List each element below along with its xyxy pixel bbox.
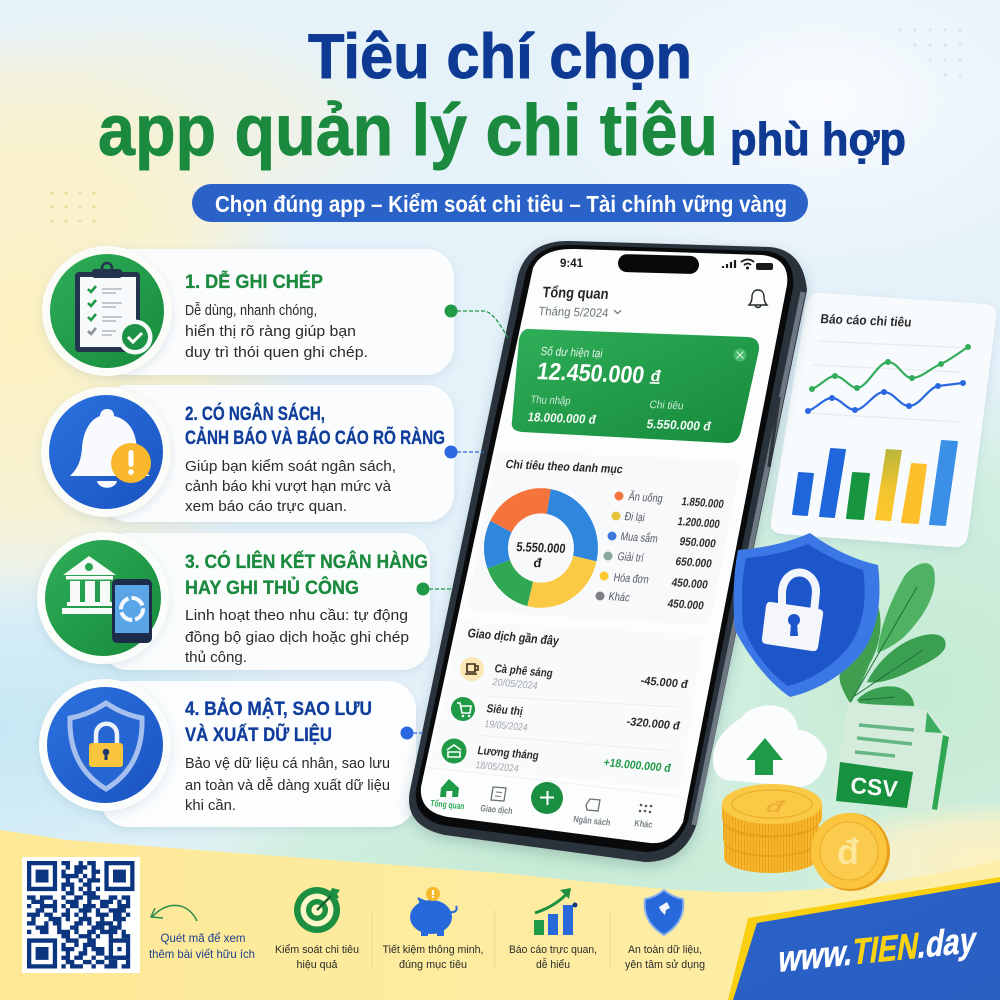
arrow: curved to QR xyxy=(151,905,197,921)
icon: growth chart xyxy=(534,888,578,935)
icon: clipboard checklist xyxy=(42,246,172,376)
text: scan caption: thêm bài viết hữu ích xyxy=(149,947,255,961)
balance card xyxy=(512,329,759,443)
text: benefit 3 xyxy=(509,944,597,971)
illustration: gold coins xyxy=(722,784,890,891)
bottom navigation bar xyxy=(427,767,677,830)
text: description 1: hiển thị rõ ràng giúp bạn xyxy=(185,323,356,340)
chart legend: Hóa đơn xyxy=(612,571,650,586)
icon: notification bell xyxy=(749,290,767,308)
balance card: 5.550.000 đ xyxy=(645,417,712,434)
balance card: Số dư hiện tại xyxy=(539,344,604,360)
text: benefit 3: dễ hiểu xyxy=(536,958,570,971)
illustration: cloud upload xyxy=(713,705,827,787)
heading 2 xyxy=(185,403,445,449)
transaction: salary: 18/05/2024 xyxy=(474,760,520,775)
text: benefit 4 xyxy=(625,944,705,971)
connector 2 xyxy=(444,446,484,458)
title: app quản lý chi tiêu xyxy=(98,91,718,171)
icon: shield padlock xyxy=(39,679,171,811)
transaction: salary: Lương tháng xyxy=(476,744,540,762)
heading 3 xyxy=(185,551,428,599)
icon: piggy bank xyxy=(410,887,457,936)
heading 1: 1. DỄ GHI CHÉP xyxy=(185,271,323,293)
status bar: 9:41 xyxy=(560,256,583,270)
benefit 3 xyxy=(509,888,597,971)
nav item: overview xyxy=(430,779,465,811)
screen header xyxy=(538,284,621,320)
balance card: 18.000.000 đ xyxy=(526,410,597,427)
balance card: 12.450.000 xyxy=(535,358,646,389)
balance card: đ xyxy=(649,367,662,385)
icon: target xyxy=(294,887,340,933)
text: scan caption: Quét mã để xem xyxy=(160,931,246,945)
nav item: budget: Ngân sách xyxy=(573,814,611,828)
icon: bell alert xyxy=(41,387,171,517)
text: description 1 xyxy=(185,302,368,361)
title: phù hợp xyxy=(730,113,906,165)
heading 4 xyxy=(185,698,372,746)
title xyxy=(98,22,906,171)
chart legend: 450.000 xyxy=(666,597,705,612)
text: description 3: đồng bộ giao dịch hoặc ghi chép xyxy=(185,629,409,646)
recent transactions panel xyxy=(430,622,703,790)
illustration: 3D shield with padlock xyxy=(734,533,879,697)
QR code xyxy=(22,857,140,973)
text: website url: www.TIEN.day xyxy=(775,918,980,980)
heading 2: CẢNH BÁO VÀ BÁO CÁO RÕ RÀNG xyxy=(185,427,445,449)
chart legend: Ăn uống xyxy=(627,490,664,505)
text: benefit 2 xyxy=(382,944,484,971)
balance card: Chi tiêu xyxy=(648,399,685,412)
heading 3: HAY GHI THỦ CÔNG xyxy=(185,577,359,599)
chart legend: Mua sắm xyxy=(619,530,659,546)
transaction: supermarket: Siêu thị xyxy=(485,702,524,718)
benefit 1 xyxy=(275,887,359,971)
title: Tiêu chí chọn xyxy=(308,22,692,92)
text: description 4: khi cần. xyxy=(185,797,236,814)
connector 3 xyxy=(416,582,453,596)
text: description 1: Dễ dùng, nhanh chóng, xyxy=(185,302,317,319)
nav item: overview: Tổng quan xyxy=(430,798,465,811)
text: description 3: thủ công. xyxy=(185,649,247,666)
text: benefit 2: đúng mục tiêu xyxy=(399,959,467,971)
line chart xyxy=(805,344,971,414)
illustration: plant leaves xyxy=(839,563,946,706)
chart legend: Đi lại xyxy=(623,510,646,524)
text: description 2: cảnh báo khi vượt hạn mức và xyxy=(185,478,392,495)
phone xyxy=(409,241,807,862)
subtitle pill xyxy=(192,184,808,222)
transaction: supermarket: 19/05/2024 xyxy=(483,719,529,734)
panel: expense report card xyxy=(771,293,996,547)
phone body xyxy=(409,241,807,862)
nav item: more: Khác xyxy=(634,818,653,830)
nav item: more xyxy=(634,804,653,830)
donut chart: 5.550.000 xyxy=(516,539,566,556)
chart legend: 1.850.000 xyxy=(680,495,725,511)
heading 3: 3. CÓ LIÊN KẾT NGÂN HÀNG xyxy=(185,551,428,573)
heading 2: 2. CÓ NGÂN SÁCH, xyxy=(185,403,325,425)
chart legend: Giải trí xyxy=(616,550,646,565)
text: benefit 2: Tiết kiệm thông minh, xyxy=(382,944,484,956)
text: description 2: Giúp bạn kiểm soát ngân sách, xyxy=(185,458,396,475)
text: benefit 3: Báo cáo trực quan, xyxy=(509,944,597,956)
nav item: budget xyxy=(573,799,611,828)
text: report title: Báo cáo chi tiêu xyxy=(820,311,912,330)
text: benefit 1 xyxy=(275,944,359,971)
transaction: coffee: Cà phê sáng xyxy=(493,662,554,680)
panel: criterion 4 xyxy=(39,679,416,827)
spending by category panel: Chi tiêu theo danh mục xyxy=(504,457,624,476)
recent transactions panel: Giao dịch gần đây xyxy=(466,626,560,648)
transaction: coffee: -45.000 đ xyxy=(639,674,690,691)
panel: criterion 3 xyxy=(37,532,430,670)
nav item: transactions: Giao dịch xyxy=(480,803,513,816)
chart legend: 650.000 xyxy=(674,555,713,570)
panel: criterion 2 xyxy=(41,385,454,522)
text: description 2: xem báo cáo trực quan. xyxy=(185,498,347,515)
spending by category panel xyxy=(468,452,740,625)
add button xyxy=(531,782,563,814)
icon: bank and phone sync xyxy=(37,532,169,664)
illustration: CSV document: CSV xyxy=(849,772,899,802)
illustration: gold coins: đ xyxy=(837,831,859,872)
transaction: supermarket xyxy=(451,697,682,734)
status bar xyxy=(560,256,773,270)
transaction: salary xyxy=(442,738,673,775)
nav item: transactions xyxy=(480,787,513,816)
benefit 2 xyxy=(382,887,484,971)
heading 4: VÀ XUẤT DỮ LIỆU xyxy=(185,724,332,746)
text: scan caption xyxy=(149,931,255,961)
text: description 3: Linh hoạt theo nhu cầu: tự động xyxy=(185,607,408,624)
heading 4: 4. BẢO MẬT, SAO LƯU xyxy=(185,698,372,720)
text: description 2 xyxy=(185,458,396,515)
chart legend: 950.000 xyxy=(678,535,717,550)
chart legend: 1.200.000 xyxy=(676,515,721,531)
screen header: Tổng quan xyxy=(542,284,610,303)
text: benefit 4: An toàn dữ liệu, xyxy=(628,944,702,956)
text: benefit 4: yên tâm sử dụng xyxy=(625,959,705,971)
connector 1 xyxy=(444,304,508,338)
screen header: Tháng 5/2024 xyxy=(538,304,610,320)
chart legend: Khác xyxy=(607,590,631,604)
illustration: CSV document xyxy=(833,702,949,810)
transaction: salary: +18.000.000 đ xyxy=(602,756,673,775)
text: description 3 xyxy=(185,607,409,666)
transaction: supermarket: -320.000 đ xyxy=(625,715,682,733)
bottom yellow band xyxy=(0,830,1000,1000)
text: description 4: Bảo vệ dữ liệu cá nhân, sao lưu xyxy=(185,755,390,772)
text: benefit 1: hiệu quả xyxy=(296,959,338,971)
balance card: Thu nhập xyxy=(529,394,572,408)
panel: criterion 1 xyxy=(42,246,454,376)
illustration: gold coins: đ xyxy=(761,797,788,816)
connector 4 xyxy=(400,726,423,740)
transaction: coffee: 20/05/2024 xyxy=(491,677,539,692)
transaction: coffee xyxy=(460,657,690,692)
website banner xyxy=(728,877,1000,1000)
text: description 1: duy trì thói quen ghi chép. xyxy=(185,344,368,361)
dynamic island xyxy=(618,254,699,274)
benefit 4 xyxy=(625,890,705,971)
donut chart: đ xyxy=(533,555,542,570)
text: benefit 1: Kiểm soát chi tiêu xyxy=(275,944,359,956)
bar chart xyxy=(793,441,957,525)
text: description 4 xyxy=(185,755,390,814)
donut chart xyxy=(496,501,586,595)
phone screen xyxy=(421,249,787,843)
icon: small shield xyxy=(645,890,683,935)
text: description 4: an toàn và dễ dàng xuất dữ liệu xyxy=(185,777,390,794)
chart legend: 450.000 xyxy=(670,576,709,591)
subtitle pill: Chọn đúng app – Kiểm soát chi tiêu – Tài chính vững vàng xyxy=(215,191,787,217)
chart legend xyxy=(596,490,725,612)
phone side button xyxy=(769,397,779,467)
